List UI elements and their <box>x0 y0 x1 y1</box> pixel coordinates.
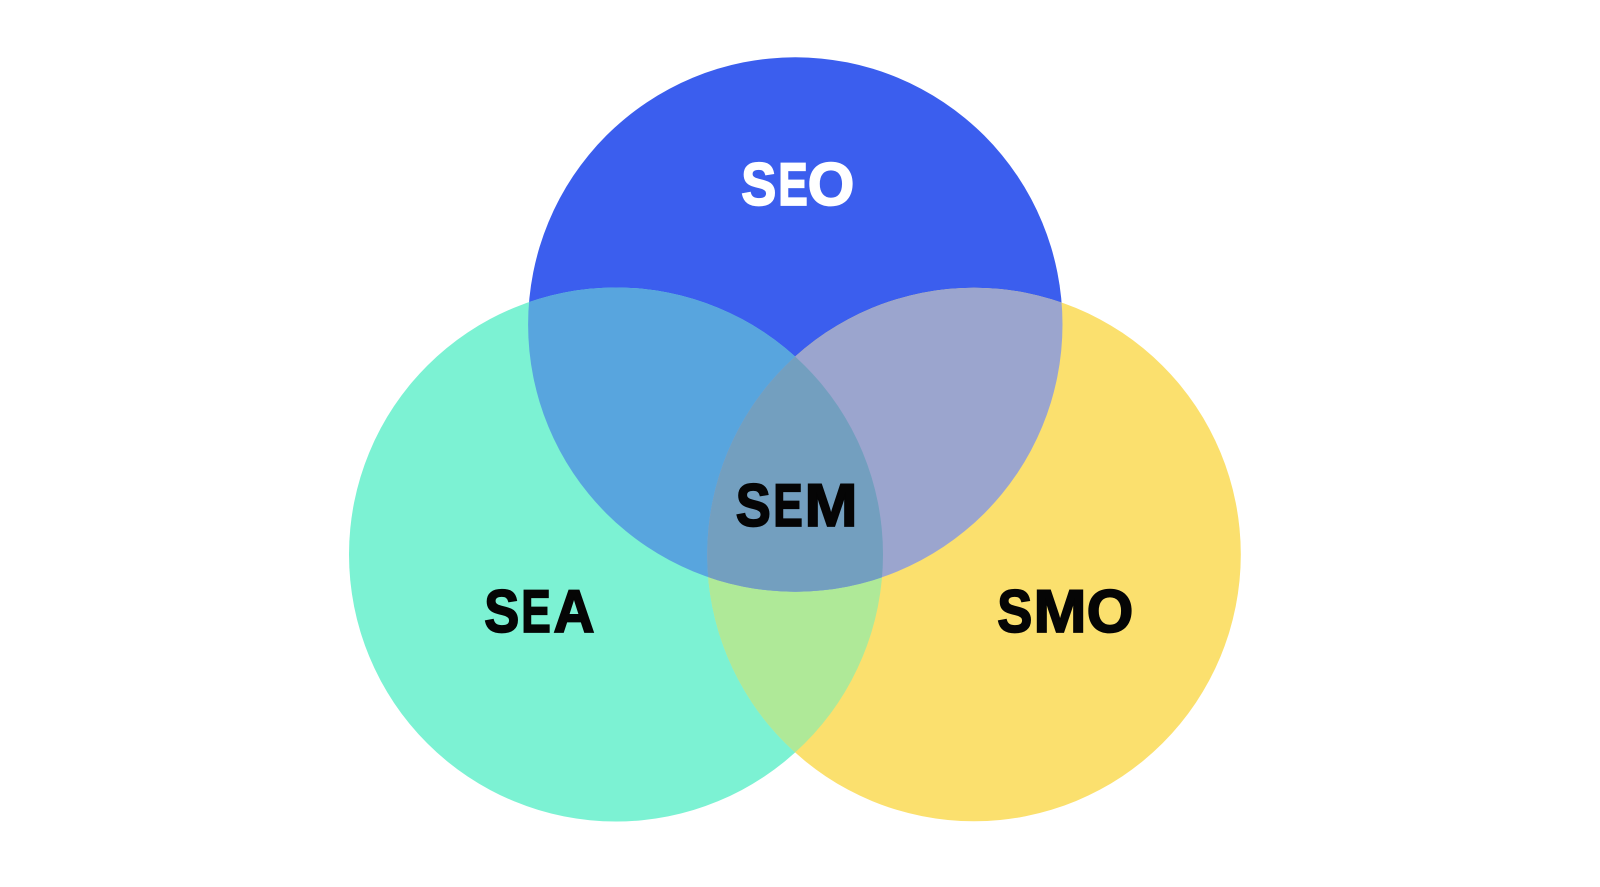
label: SEO: S <box>741 151 776 218</box>
label: SEM: M <box>804 472 858 539</box>
label: SMO: M <box>1034 578 1086 645</box>
overlap: SEA and SMO <box>708 577 882 752</box>
label: SMO: O <box>1087 578 1133 645</box>
overlap: SEO and SMO <box>707 288 1062 592</box>
label: SEM: E <box>773 472 803 539</box>
label: SEA: A <box>554 578 594 645</box>
label: SEO: O <box>808 151 854 218</box>
label: SEA: S <box>484 578 519 645</box>
venn diagram <box>349 57 1241 822</box>
overlap: centre SEM region <box>707 356 883 592</box>
circle: SEO <box>528 57 1062 592</box>
label: SEM: S <box>736 472 771 539</box>
label: SMO: S <box>997 578 1032 645</box>
label: SEA: E <box>521 578 551 645</box>
circle: SEA <box>349 288 883 822</box>
circle: SMO <box>707 288 1241 821</box>
label: SEO: E <box>778 151 808 218</box>
overlap: SEO and SEA <box>528 288 881 592</box>
